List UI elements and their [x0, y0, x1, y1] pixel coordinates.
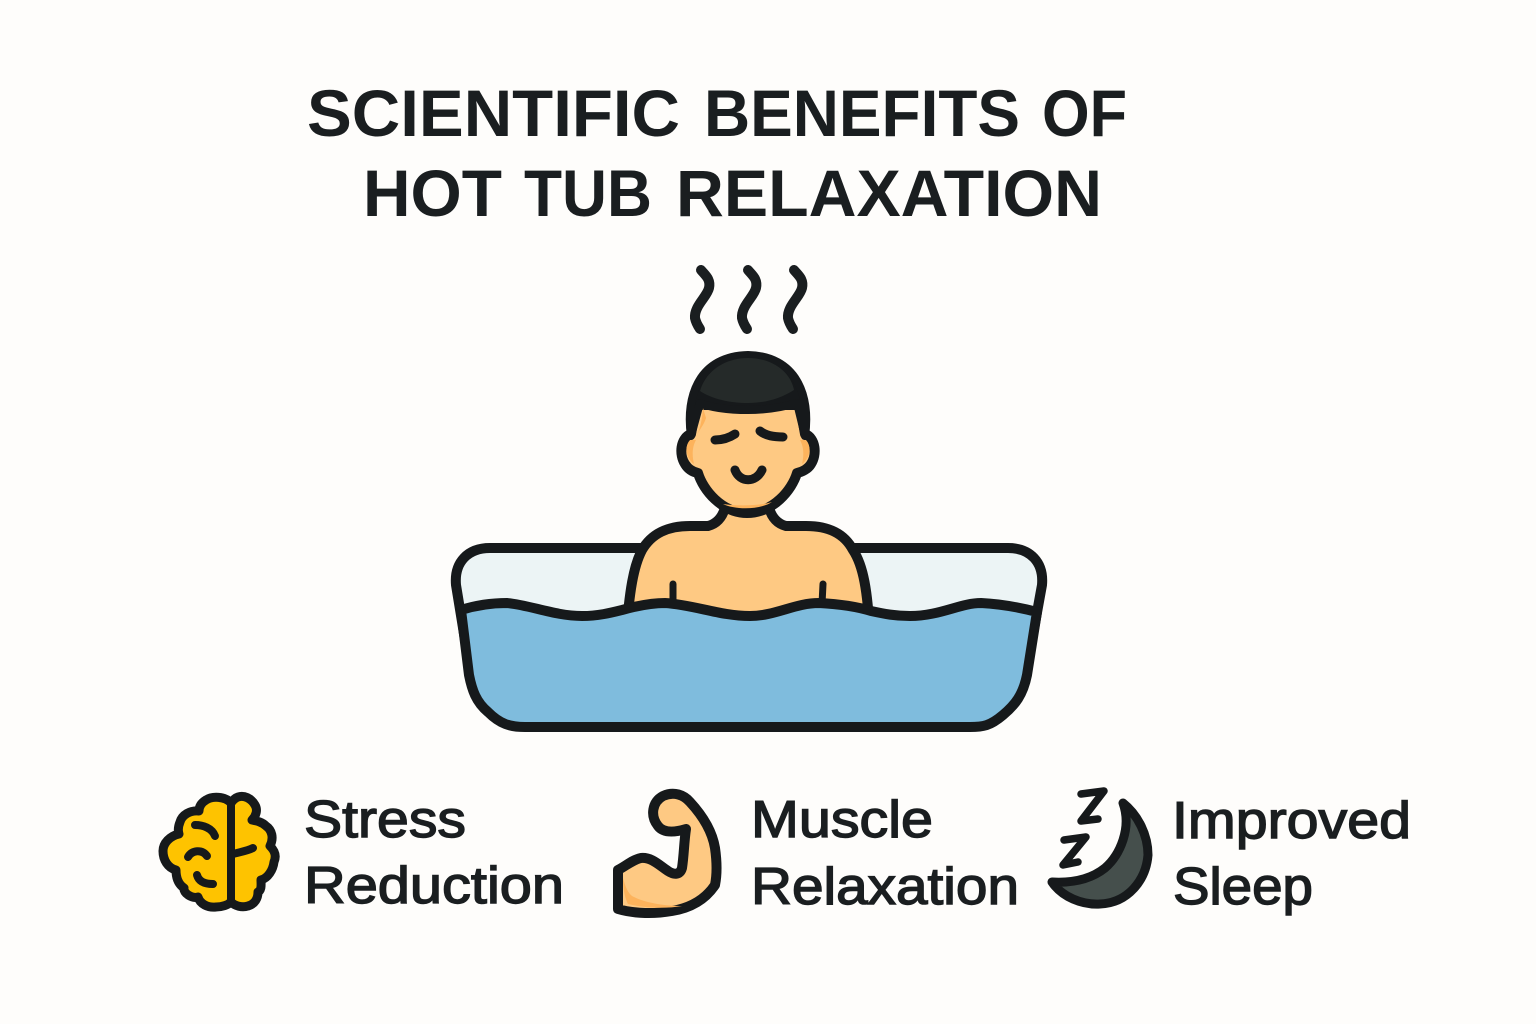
- water: [461, 603, 1037, 727]
- brain outline: [163, 796, 275, 907]
- arm shading: [623, 878, 682, 908]
- label: stress reduction: Stress: [304, 791, 466, 849]
- icon: flexed arm: [618, 794, 716, 913]
- icon: steam: [695, 270, 802, 329]
- title: OF: [1042, 76, 1127, 150]
- illustration: person in hot tub: [456, 355, 1042, 727]
- title: [307, 76, 1127, 230]
- title: HOT: [363, 156, 502, 230]
- moon: [1052, 803, 1148, 904]
- smile: [735, 470, 762, 480]
- title: BENEFITS: [704, 76, 1020, 150]
- letters z: [1063, 791, 1104, 865]
- tub rim: [456, 548, 1042, 640]
- label: improved sleep: [1172, 792, 1411, 916]
- label: improved sleep: Improved: [1172, 792, 1411, 850]
- brain folds: [188, 803, 253, 902]
- label: muscle relaxation: [751, 791, 1019, 916]
- label: muscle relaxation: Muscle: [751, 791, 933, 849]
- icon: brain: [163, 796, 275, 907]
- icon: moon and zzz: [1052, 791, 1148, 904]
- arm lines: [673, 584, 823, 604]
- hair: [690, 355, 806, 436]
- face shading: [687, 408, 809, 508]
- title: RELAXATION: [676, 156, 1102, 230]
- title: SCIENTIFIC: [307, 76, 680, 150]
- closed eyes: [715, 431, 783, 440]
- label: stress reduction: Reduction: [304, 857, 564, 915]
- title: TUB: [524, 156, 652, 230]
- label: improved sleep: Sleep: [1173, 858, 1313, 916]
- label: muscle relaxation: Relaxation: [751, 858, 1019, 916]
- person torso: [626, 508, 870, 640]
- head: [681, 355, 815, 513]
- label: stress reduction: [304, 791, 564, 915]
- face and ears: [681, 405, 815, 513]
